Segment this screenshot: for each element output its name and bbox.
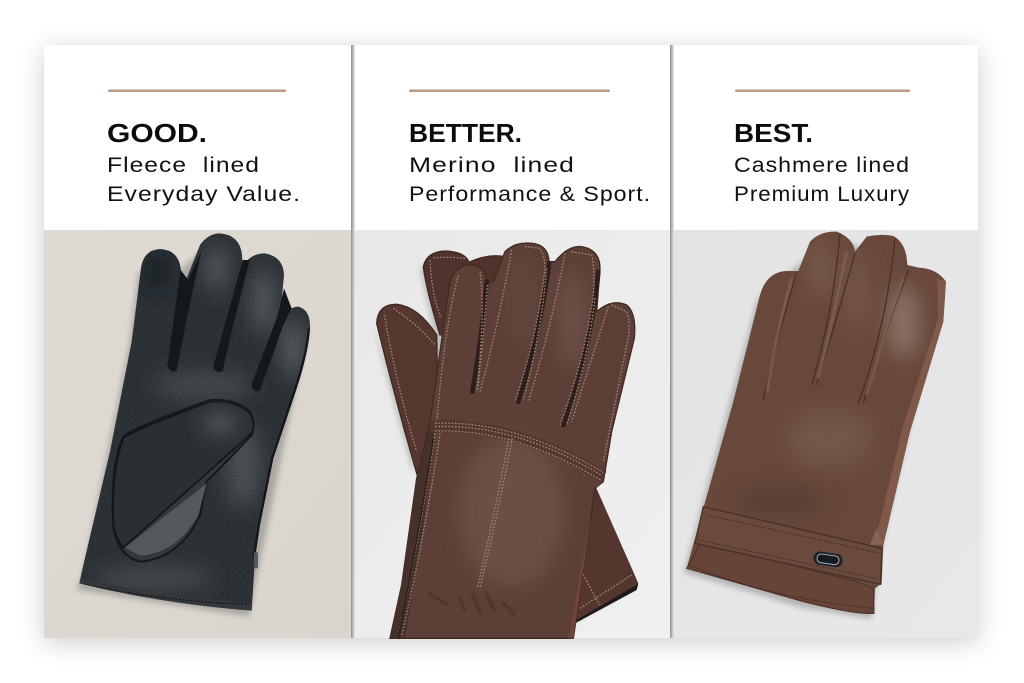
text: Everyday Value: Everyday Value. (107, 182, 301, 206)
heading: BEST: BEST. (734, 118, 813, 148)
panel: better (355, 45, 671, 638)
stitched seams (437, 247, 629, 462)
palm patch with thumb opening (113, 400, 254, 562)
finger creases (763, 233, 908, 403)
header background: best (674, 45, 978, 231)
finger gaps (167, 250, 202, 372)
snap button (813, 551, 843, 568)
back glove (373, 251, 638, 624)
photo background: good (44, 230, 352, 638)
finger slits (472, 263, 598, 425)
accent rule: better (409, 90, 610, 92)
text: Fleece lined: Fleece lined (107, 153, 260, 177)
panel: good (44, 45, 352, 638)
icon: pair of brown stitched gloves (373, 243, 638, 638)
icon: smooth brown glove with strap (684, 232, 946, 619)
divider between good and better (351, 45, 355, 638)
text: Merino lined: Merino lined (409, 153, 575, 177)
heading: BETTER: BETTER. (409, 118, 522, 148)
photo background: best (674, 230, 978, 638)
heading: GOOD: GOOD. (107, 118, 207, 148)
accent rule: best (735, 90, 910, 92)
header background: good (44, 45, 352, 231)
strap and cuff (687, 543, 874, 614)
photo background: better (355, 230, 671, 638)
text: Cashmere lined: Cashmere lined (734, 153, 910, 177)
panel: best (674, 45, 978, 638)
divider between better and best (670, 45, 674, 638)
text: Premium Luxury: Premium Luxury (734, 182, 910, 206)
icon: black leather glove (76, 233, 310, 618)
front glove (390, 243, 635, 638)
card drop shadow (44, 50, 978, 642)
text: Performance and Sport: Performance & Sport. (409, 182, 651, 206)
accent rule: good (108, 90, 286, 92)
header background: better (355, 45, 671, 231)
